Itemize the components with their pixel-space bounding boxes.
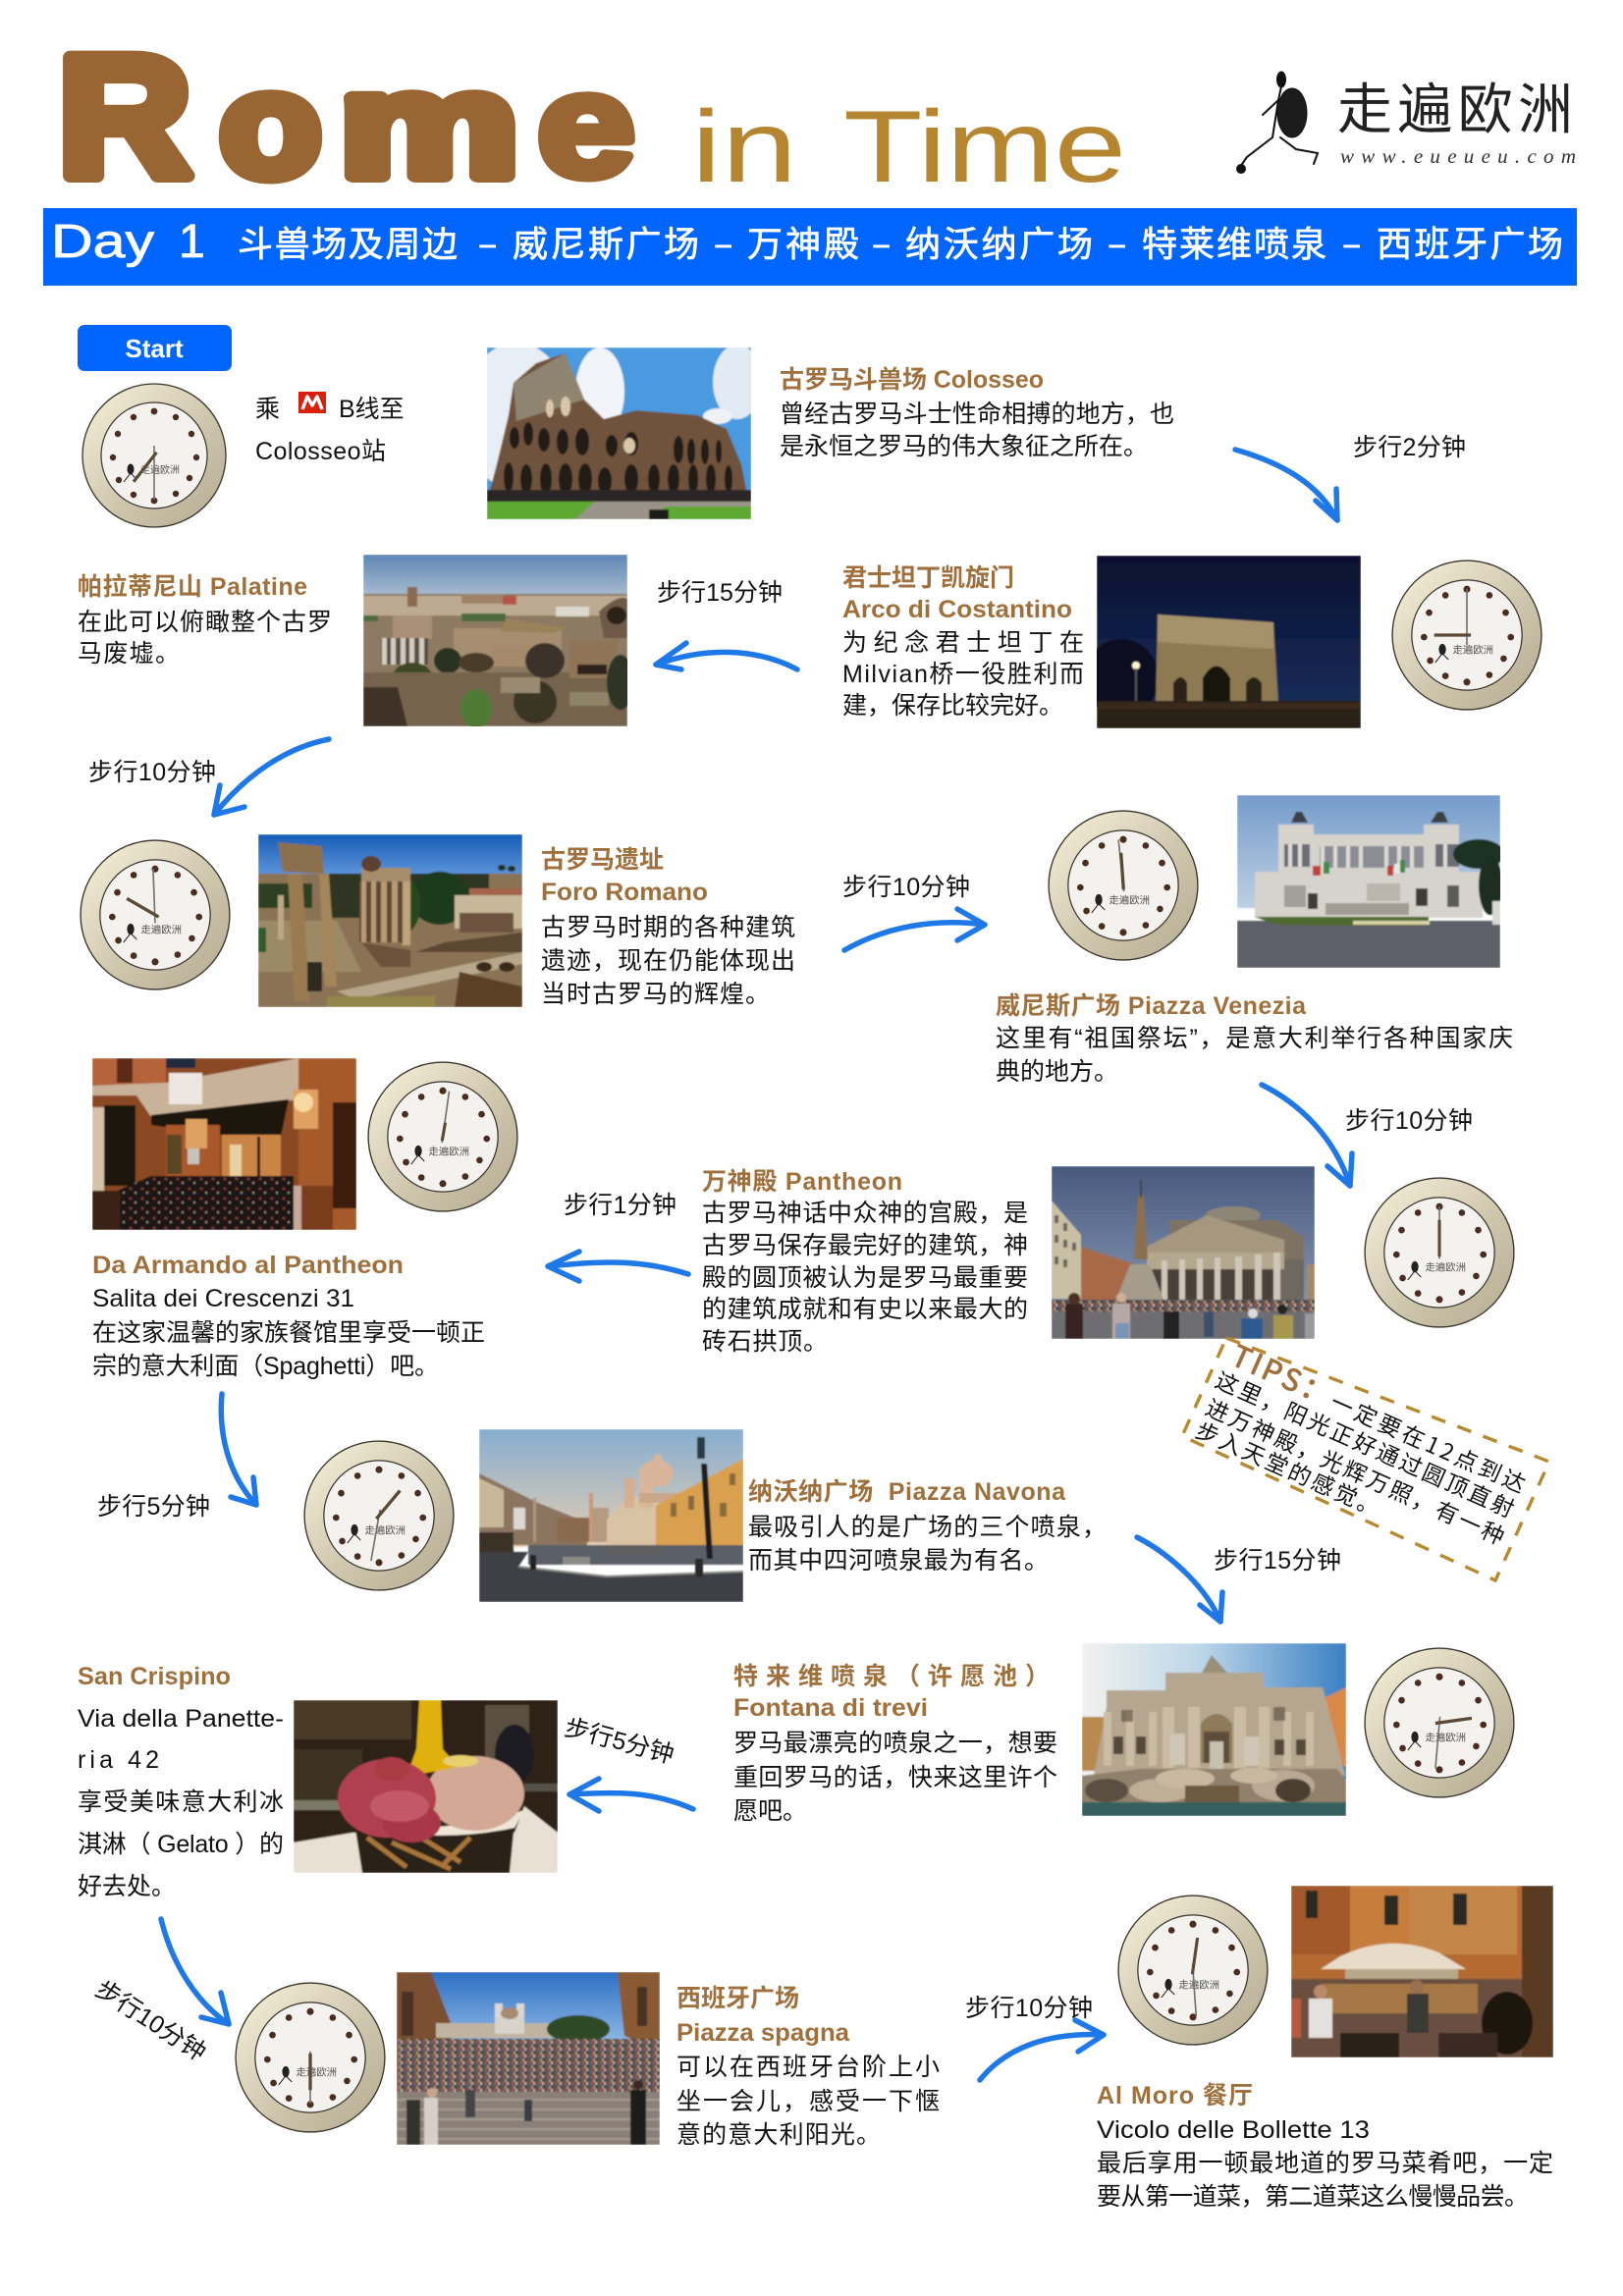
start button — [78, 325, 232, 371]
description: 要从第一道菜，第二道菜这么慢慢品尝。 — [1097, 2183, 1529, 2211]
arrow — [221, 1394, 256, 1505]
clock: Piazza Venezia — [1049, 811, 1198, 960]
photo: Fontana di Trevi — [1082, 1643, 1346, 1816]
heading: 特来维喷泉（许愿池） — [733, 1663, 1050, 1690]
banner stops: – — [714, 216, 732, 267]
metro directions: Colosseo站 — [255, 438, 386, 465]
metro directions: B线至 — [339, 396, 405, 423]
photo: Piazza Venezia — [1237, 795, 1500, 968]
tips text — [1191, 1332, 1535, 1552]
description — [541, 914, 795, 1008]
clock: Trevi — [1365, 1648, 1514, 1797]
banner stops: 西班牙广场 — [1377, 216, 1563, 267]
clock: Piazza Navona — [304, 1441, 454, 1590]
description: 古罗马时期的各种建筑 — [541, 914, 795, 941]
clock: Pantheon: 走遍欧洲 — [1425, 1261, 1466, 1274]
description: ria 42 — [78, 1746, 159, 1774]
description: 最后享用一顿最地道的罗马菜肴吧，一定 — [1097, 2150, 1553, 2177]
tips text: TIPS：一定要在12点到达 — [1225, 1332, 1535, 1501]
description — [92, 1285, 485, 1380]
banner heading: Day 1: Day — [51, 216, 154, 268]
arrow — [656, 643, 797, 669]
tips text: 进万神殿，光辉万照，有一种 — [1201, 1389, 1510, 1552]
clock: Da Armando — [368, 1062, 517, 1211]
banner: day 1 route — [43, 208, 1577, 286]
stop: San Crispino text — [78, 1663, 284, 1900]
description: 为纪念君士坦丁在 — [842, 629, 1084, 657]
description: 马废墟。 — [78, 640, 180, 667]
description — [1097, 2116, 1553, 2211]
heading: San Crispino — [78, 1663, 231, 1690]
description: 坐一会儿，感受一下惬 — [676, 2088, 940, 2115]
arrow — [548, 1252, 688, 1281]
description: 当时古罗马的辉煌。 — [541, 981, 770, 1008]
description — [676, 2054, 940, 2149]
heading: 西班牙广场 — [676, 1985, 799, 2012]
arrow — [980, 2020, 1104, 2080]
stop: Pantheon text — [702, 1168, 1028, 1356]
walk label: 步行10分钟 — [842, 874, 970, 901]
description: 殿的圆顶被认为是罗马最重要 — [702, 1264, 1028, 1292]
stop: Al Moro text — [1097, 2082, 1553, 2211]
arrow — [569, 1779, 693, 1811]
heading: 万神殿 Pantheon — [702, 1168, 902, 1196]
tips callout — [1182, 1332, 1549, 1580]
title word: Rome: e — [537, 42, 635, 207]
tips text: 这里，阳光正好通过圆顶直射 — [1211, 1362, 1520, 1524]
arrow — [214, 739, 329, 815]
description: 的建筑成就和有史以来最大的 — [702, 1296, 1028, 1323]
description: 享受美味意大利冰 — [78, 1789, 284, 1816]
heading — [541, 846, 708, 906]
walk label: 步行5分钟 — [97, 1493, 210, 1521]
title words: in Time — [691, 90, 1126, 204]
description — [996, 1025, 1513, 1086]
clock: Piazza Venezia: 走遍欧洲 — [1109, 894, 1150, 907]
description: 典的地方。 — [996, 1058, 1118, 1086]
walk label: 步行2分钟 — [1353, 434, 1466, 461]
description: 古罗马保存最完好的建筑，神 — [702, 1232, 1028, 1259]
walk label: 步行5分钟 — [562, 1714, 676, 1769]
heading: Da Armando al Pantheon — [92, 1252, 404, 1279]
banner stops: – — [872, 216, 891, 267]
clock: Piazza Navona: 走遍欧洲 — [364, 1524, 406, 1537]
description: 而其中四河喷泉最为有名。 — [748, 1547, 1049, 1575]
arrow — [1262, 1085, 1352, 1186]
photo: Arco di Costantino — [1097, 556, 1361, 728]
heading: 威尼斯广场 Piazza Venezia — [996, 992, 1307, 1020]
clock: start: 走遍欧洲 — [140, 463, 180, 476]
stop: Palatine text — [78, 572, 332, 667]
stop: Piazza di Spagna text — [676, 1985, 940, 2149]
banner stops: 万神殿 — [747, 216, 859, 267]
banner stops: 纳沃纳广场 — [905, 216, 1093, 267]
arrow — [1235, 450, 1337, 520]
heading — [676, 1985, 850, 2047]
description: 愿吧。 — [733, 1797, 807, 1825]
walk label: 步行10分钟 — [88, 759, 216, 786]
clock: Foro Romano — [81, 840, 230, 989]
stop: Fontana di Trevi text — [733, 1663, 1057, 1825]
description: 宗的意大利面（Spaghetti）吧。 — [92, 1353, 439, 1380]
description: 这里有“祖国祭坛”，是意大利举行各种国家庆 — [996, 1025, 1513, 1052]
description — [733, 1730, 1057, 1825]
walk label: 步行10分钟 — [1345, 1107, 1473, 1135]
clock: Arco — [1392, 561, 1542, 710]
description: 砖石拱顶。 — [702, 1328, 828, 1356]
clock: start — [82, 384, 226, 527]
logo text: 走遍欧洲 — [1337, 66, 1573, 145]
photo: Foro Romano — [258, 834, 522, 1007]
photo: Piazza Navona — [479, 1429, 743, 1602]
description: Milvian桥一役胜利而 — [842, 661, 1084, 688]
banner heading: Day 1 — [51, 216, 205, 268]
clock: Piazza di Spagna: 走遍欧洲 — [296, 2066, 337, 2079]
stop: Da Armando text — [92, 1252, 485, 1380]
description: 意的意大利阳光。 — [676, 2121, 881, 2149]
tips text: 步入天堂的感觉。 — [1191, 1412, 1386, 1523]
clock: Al Moro: 走遍欧洲 — [1178, 1979, 1219, 1992]
title word: Rome — [58, 22, 635, 213]
walk label: 步行1分钟 — [564, 1192, 676, 1219]
walk label: 步行10分钟 — [90, 1975, 211, 2066]
photo: Colosseum — [487, 347, 751, 519]
clock: Pantheon — [1365, 1178, 1514, 1327]
heading: Foro Romano — [541, 879, 708, 906]
stop: Arco text — [842, 564, 1084, 720]
banner stops: – — [478, 216, 497, 267]
start button: Start — [125, 334, 184, 363]
description: 曾经古罗马斗士性命相搏的地方，也 — [780, 400, 1174, 428]
clock: Da Armando: 走遍欧洲 — [428, 1146, 469, 1158]
heading — [842, 564, 1072, 623]
description: Via della Panette- — [78, 1705, 284, 1733]
description — [748, 1514, 1107, 1575]
walk label: 步行15分钟 — [657, 579, 783, 607]
banner stops: – — [1342, 216, 1361, 267]
heading — [733, 1663, 1050, 1722]
title words: in Time: Time — [843, 90, 1126, 204]
photo: Da Armando al Pantheon — [92, 1058, 356, 1230]
title word: Rome: R — [58, 22, 191, 213]
stop: Foro Romano text — [541, 846, 795, 1008]
heading: 纳沃纳广场 Piazza Navona — [748, 1478, 1066, 1506]
metro directions — [255, 392, 405, 465]
photo: Al Moro — [1291, 1886, 1553, 2057]
description: 建，保存比较完好。 — [842, 692, 1063, 720]
description: 古罗马神话中众神的宫殿，是 — [702, 1200, 1028, 1227]
description: 在此可以俯瞰整个古罗 — [78, 609, 332, 636]
banner stops: 斗兽场及周边 — [238, 216, 458, 267]
logo: 走遍欧洲 — [1237, 66, 1576, 173]
title word: Rome: o — [220, 42, 321, 207]
description: 遗迹，现在仍能体现出 — [541, 947, 795, 975]
banner stops: 威尼斯广场 — [513, 216, 699, 267]
arrow — [844, 909, 985, 950]
clock: Al Moro — [1118, 1896, 1268, 2045]
heading: 君士坦丁凯旋门 — [842, 564, 1014, 592]
heading: 古罗马遗址 — [541, 846, 664, 874]
photo: Palatine — [363, 555, 627, 726]
title — [58, 22, 1126, 213]
description: Salita dei Crescenzi 31 — [92, 1285, 354, 1312]
heading: Arco di Costantino — [842, 596, 1072, 623]
clock: Trevi: 走遍欧洲 — [1425, 1732, 1466, 1744]
description: 最吸引人的是广场的三个喷泉， — [748, 1514, 1107, 1541]
banner stops — [238, 216, 1563, 267]
banner stops: 特莱维喷泉 — [1142, 216, 1326, 267]
description: 好去处。 — [78, 1873, 176, 1900]
description — [78, 609, 332, 667]
clock: Foro Romano: 走遍欧洲 — [140, 924, 182, 936]
walk label: 步行10分钟 — [965, 1995, 1093, 2022]
description: 重回罗马的话，快来这里许个 — [733, 1764, 1057, 1791]
start block — [78, 325, 405, 527]
stop: Piazza Venezia text — [996, 992, 1513, 1086]
description: 淇淋（ Gelato ）的 — [78, 1831, 284, 1858]
icon: metro M — [298, 392, 326, 413]
description: 是永恒之罗马的伟大象征之所在。 — [780, 433, 1148, 460]
banner stops: – — [1108, 216, 1126, 267]
heading: 帕拉蒂尼山 Palatine — [78, 572, 307, 601]
photo: Gelato — [294, 1700, 558, 1873]
description — [702, 1200, 1028, 1356]
metro directions: 乘 — [255, 396, 280, 423]
heading: Piazza spagna — [676, 2019, 850, 2047]
photo: Piazza di Spagna — [397, 1972, 660, 2145]
stop: Colosseo text — [780, 366, 1174, 460]
heading: Al Moro 餐厅 — [1097, 2082, 1253, 2109]
banner heading: Day 1: 1 — [179, 216, 205, 268]
description — [78, 1705, 284, 1900]
description: 在这家温馨的家族餐馆里享受一顿正 — [92, 1319, 485, 1347]
description: 可以在西班牙台阶上小 — [676, 2054, 940, 2081]
description — [780, 400, 1174, 460]
title words: in Time: in — [691, 90, 797, 204]
title word: Rome: m — [340, 42, 518, 207]
icon: walker figure — [1237, 72, 1318, 173]
photo: Pantheon — [1052, 1166, 1315, 1339]
heading: 古罗马斗兽场 Colosseo — [780, 366, 1044, 394]
stop: Piazza Navona text — [748, 1478, 1107, 1575]
description: Vicolo delle Bollette 13 — [1097, 2116, 1370, 2144]
arrow — [161, 1919, 229, 2024]
clock: Piazza di Spagna — [236, 1983, 385, 2132]
clock: Arco: 走遍欧洲 — [1452, 644, 1493, 657]
description: 罗马最漂亮的喷泉之一，想要 — [733, 1730, 1057, 1757]
walk label: 步行15分钟 — [1214, 1547, 1341, 1575]
arrow — [1137, 1537, 1222, 1622]
description — [842, 629, 1084, 720]
heading: Fontana di trevi — [733, 1694, 928, 1722]
logo url: www.eueueu.com — [1340, 144, 1576, 168]
